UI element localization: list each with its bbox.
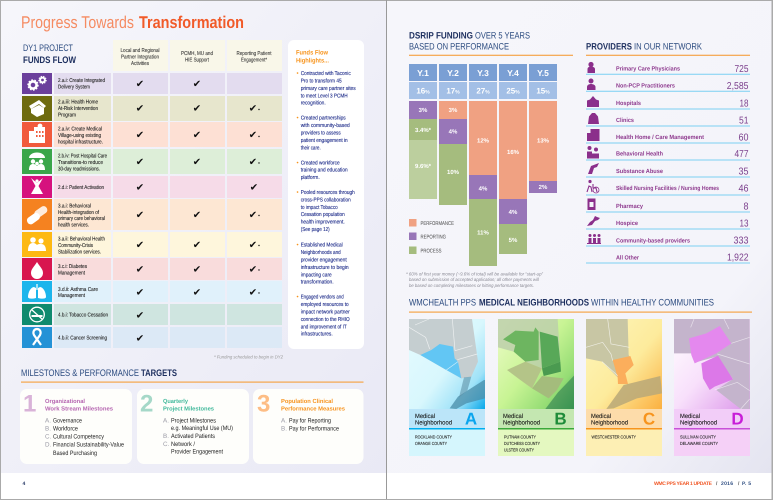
table row 2.a.iii: ✔ (193, 103, 201, 114)
left page number: 4 (22, 481, 26, 487)
row: substance abuse (588, 163, 749, 178)
heading: DY1 project funds flow: DY1 PROJECT (23, 43, 73, 54)
panel: quarterly project milestones: Network / (171, 441, 195, 448)
table row 2.b.iv (22, 149, 282, 174)
year headers: Y.2 (447, 68, 459, 78)
row: clinics: Clinics (616, 117, 635, 124)
row: health home care management: 60 (738, 132, 749, 144)
table row 3.c.i: ✔ (249, 264, 257, 275)
table row 3.d.ii (22, 281, 282, 302)
right page background (387, 0, 773, 500)
panel: quarterly project milestones: Provider Engagement (171, 449, 223, 456)
table row 3.c.i: 3.c.i: Diabetes (58, 263, 87, 270)
icon: house (29, 100, 46, 117)
heading: DSRIP funding (409, 30, 573, 56)
chart: DSRIP funding stacked bars (409, 64, 557, 266)
icon: clasped hands (26, 205, 49, 226)
row: primary care physicians: Primary Care Physicians (616, 66, 681, 72)
panel: neighborhood D: SULLIVAN COUNTY (680, 435, 716, 440)
panel: neighborhood D: Medical (680, 413, 700, 420)
highlight: medical neighborhoods: provider engagement (301, 256, 347, 264)
highlight: pooled resources: (See page 12) (301, 226, 330, 233)
table column headers: HIE Support (185, 58, 209, 64)
highlights heading: Highlights... (296, 58, 329, 64)
table row 4.b.ii: 4.b.ii: Cancer Screening (58, 334, 107, 342)
bar Y.2: 10% (447, 169, 460, 176)
highlight: PCMH recognition: to meet Level 3 PCMH (301, 92, 348, 99)
row: skilled nursing facilities: Skilled Nursing Facilities / Nursing Homes (616, 185, 720, 192)
table row 3.c.i: ✔ (136, 264, 144, 275)
heading: DSRIP funding: DSRIP FUNDING (409, 30, 473, 40)
table column headers: Local and Regional (120, 47, 160, 54)
row: health home care management (587, 129, 749, 144)
table row 4.b.i: 4.b.i: Tobacco Cessation (58, 312, 108, 318)
row: skilled nursing facilities: 46 (738, 184, 749, 194)
table row 2.a.iv (22, 122, 282, 147)
heading: DY1 project funds flow (23, 43, 76, 66)
icon: no smoking (30, 307, 44, 322)
table row 3.a.i: ✔ (193, 210, 201, 221)
table row 3.d.ii: ✔ (193, 287, 201, 298)
table row 3.c.i (22, 258, 282, 280)
left page background (0, 0, 386, 500)
title: Transformation (139, 13, 244, 32)
table row 2.b.iv: ✔ (249, 157, 257, 168)
bar Y.5: 13% (537, 138, 550, 144)
bar Y.4: 4% (509, 209, 518, 216)
highlight: workforce training: training and education (301, 167, 348, 174)
panel: population clinical performance measures: Pay for Performance (289, 425, 339, 432)
row: clinics: 51 (739, 116, 749, 126)
year headers: Y.5 (537, 68, 549, 78)
highlight: engaged vendors: infrastructures. (301, 331, 333, 338)
table row 2.a.iv: ✔ (249, 130, 257, 141)
bar Y.3: 4% (479, 186, 488, 192)
panel: neighborhood C (586, 319, 662, 456)
table row 2.a.iv: ✔ (193, 130, 201, 141)
highlight: engaged vendors (296, 294, 350, 338)
table row 3.a.ii: ✔ (249, 240, 257, 251)
panel: organizational milestones: 1 (23, 390, 36, 418)
panel: quarterly project milestones: C. (163, 441, 170, 448)
row: pharmacy: Pharmacy (616, 203, 644, 210)
table row 3.d.ii: Management (58, 293, 85, 299)
panel: organizational milestones: D. (45, 442, 52, 449)
table row 3.a.i: health services. (58, 221, 89, 228)
table row 3.a.i: ✔ (249, 210, 257, 221)
table row 2.b.iv: Transitions-to reduce (58, 159, 103, 166)
table row 3.a.i: 3.a.i: Behavioral (58, 202, 91, 210)
highlight: partnerships: their care. (301, 144, 321, 151)
panel: neighborhood D: DELAWARE COUNTY (680, 441, 718, 446)
table row 3.a.i: Health-integration of (58, 209, 99, 216)
highlight: engaged vendors: and improvement of IT (301, 323, 347, 330)
highlight: medical neighborhoods: Established Medical (301, 242, 343, 249)
bar Y.2 (439, 101, 467, 205)
table row 2.a.iii (22, 96, 282, 121)
map B (498, 319, 574, 409)
bar Y.1: 9.6%* (415, 163, 432, 170)
heading: DSRIP funding: OVER 5 YEARS (475, 30, 530, 40)
table row 3.a.ii: ✔ (136, 240, 144, 251)
table row 2.b.iv: ✔ (193, 157, 201, 168)
panel: neighborhood C: WESTCHESTER COUNTY (592, 435, 636, 440)
table row 2.d.i: 2.d.i: Patient Activation (58, 184, 104, 191)
legend (409, 219, 454, 254)
table row 2.d.i: ✔ (136, 182, 144, 193)
panel: organizational milestones: Based Purchasing (53, 450, 97, 457)
row: non-PCP practitioners (587, 78, 749, 92)
row: behavioral health (587, 146, 749, 160)
year headers: 25% (506, 86, 520, 96)
legend: REPORTING (420, 234, 446, 240)
highlight: pooled resources: health improvement. (301, 219, 345, 226)
row: community-based providers: Community-based providers (616, 238, 691, 244)
highlight: medical neighborhoods (296, 242, 349, 286)
footer: report name and page: P. 5 (742, 481, 751, 487)
table row 3.a.ii: Stabilization services. (58, 248, 101, 255)
table row 3.a.ii (22, 232, 282, 257)
bar Y.1 (409, 101, 437, 199)
panel: quarterly project milestones: Project Milestones (163, 406, 215, 412)
panel: neighborhood A: Neighborhood (415, 419, 453, 426)
row: non-PCP practitioners: 2,585 (727, 81, 749, 92)
table row 2.a.i: Delivery System (58, 84, 90, 91)
heading: milestones and performance targets: MILESTONES & PERFORMANCE (21, 368, 139, 379)
table row 2.a.iv: 2.a.iv: Create Medical (58, 126, 102, 132)
year headers: Y.4 (507, 68, 519, 78)
panel: organizational milestones: Work Stream Milestones (45, 406, 114, 412)
highlight: pooled resources: Pooled resources through (301, 189, 355, 196)
year headers: 16% (416, 86, 430, 96)
highlight: partnerships (296, 115, 350, 151)
highlight: partnerships: with community-based (300, 122, 350, 129)
panel: population clinical performance measures (253, 389, 364, 464)
row: health home care management: Health Home / Care Management (616, 134, 704, 141)
row: substance abuse: 35 (738, 166, 749, 178)
highlight: pooled resources: Cessation population (301, 211, 345, 218)
panel: organizational milestones: Workforce (53, 425, 78, 432)
row: clinics (588, 113, 749, 126)
panel: neighborhood B: DUTCHESS COUNTY (504, 441, 540, 446)
panel: organizational milestones: Financial Sustainability-Value (53, 442, 124, 449)
panel: quarterly project milestones: B. (163, 433, 169, 440)
panel: neighborhood A: A (465, 410, 477, 428)
row: hospitals (587, 96, 749, 110)
table column headers: Activities (131, 60, 149, 67)
bar Y.3: 11% (477, 230, 489, 236)
table row 2.a.iv: hospital infrastructure. (58, 138, 103, 145)
legend: PERFORMANCE (420, 221, 454, 227)
table column headers (113, 40, 282, 71)
footer: report name and page: 2016 (721, 481, 733, 487)
table row 3.c.i: Management (58, 270, 85, 276)
title (21, 13, 244, 32)
footer: report name and page: / (738, 481, 740, 487)
panel: population clinical performance measures: Pay for Reporting (289, 417, 331, 424)
heading: DSRIP funding: BASED ON PERFORMANCE (409, 42, 509, 52)
panel: quarterly project milestones: Activated Patients (171, 433, 215, 440)
highlight: medical neighborhoods: impacting care (301, 271, 332, 278)
highlight: pooled resources (296, 189, 355, 233)
panel: neighborhood A: Medical (415, 413, 435, 420)
highlight: engaged vendors: Engaged vendors and (301, 294, 344, 301)
panel: neighborhood C: Medical (591, 413, 611, 420)
table row 3.c.i: ✔ (193, 264, 201, 275)
heading: DY1 project funds flow: FUNDS FLOW (23, 55, 76, 66)
highlight: PCMH recognition: • (296, 71, 299, 77)
table row 2.b.iv: 2.b.iv: Post Hospital Care (58, 152, 107, 160)
table row 3.a.i (22, 199, 282, 230)
bar Y.4 (499, 101, 527, 254)
table row 2.a.i (22, 73, 282, 94)
row: all other: 1,922 (727, 252, 749, 264)
table column headers: Reporting Patient (236, 50, 272, 57)
highlight: workforce training: Created workforce (301, 159, 340, 166)
year headers: Y.3 (477, 68, 489, 78)
row: all other: All Other (616, 254, 640, 262)
panel: neighborhood A: ROCKLAND COUNTY (415, 435, 452, 440)
highlight: engaged vendors: employed resources to (301, 301, 349, 308)
heading: medical neighborhoods: WITHIN HEALTHY COMMUNITIES (591, 298, 714, 308)
table row 2.a.iii: At-Risk Intervention (58, 105, 98, 112)
highlight: PCMH recognition (296, 70, 356, 107)
title: Progress Towards (21, 13, 134, 32)
year headers: 17% (446, 86, 460, 96)
panel: organizational milestones: Cultural Competency (53, 433, 105, 440)
bar Y.1: 3.4%* (415, 127, 432, 134)
heading: medical neighborhoods: WMCHEALTH PPS (409, 298, 476, 308)
table row 3.a.ii: Community-Crisis (58, 242, 93, 249)
year headers: 27% (476, 86, 490, 96)
table row 2.b.iv: 30-day readmissions. (58, 165, 100, 172)
highlight: workforce training (296, 159, 348, 181)
row: hospice (587, 216, 749, 230)
table row 3.d.ii: ✔ (249, 287, 257, 298)
table row 2.a.iii: 2.a.iii: Health Home (58, 98, 98, 106)
table row 3.d.ii: 3.d.ii: Asthma Care (58, 286, 98, 293)
row: pharmacy: 8 (744, 202, 749, 212)
icon: umbrella and family (29, 152, 45, 170)
panel: organizational milestones (20, 389, 132, 464)
highlight: medical neighborhoods: transformation. (301, 279, 334, 286)
highlight: partnerships: providers to assess (301, 130, 341, 136)
highlight: PCMH recognition: Contracted with Taconic (301, 70, 351, 77)
legend: PROCESS (420, 248, 442, 254)
panel: population clinical performance measures: Population Clinical (281, 398, 333, 405)
panel: population clinical performance measures: 3 (257, 390, 270, 418)
bar Y.3 (469, 101, 497, 266)
row: hospice: 13 (740, 218, 749, 230)
row: community-based providers: 333 (734, 236, 749, 246)
chart footnote: * 60% of first year money (~9.6% of total) will be available for “start-up” (406, 272, 543, 276)
footer: report name and page: / (716, 481, 718, 487)
table row 3.a.i: ✔ (136, 210, 144, 221)
highlight: engaged vendors: impact network partner (301, 308, 350, 316)
panel: funds flow highlights (288, 40, 364, 349)
table row 2.a.iii: ✔ (249, 103, 257, 114)
panel: quarterly project milestones: Quarterly (163, 398, 189, 405)
row: community-based providers (587, 234, 749, 246)
table row 4.b.i (22, 304, 282, 325)
table row 2.d.i (22, 176, 282, 198)
highlight: pooled resources: to impact Tobacco (301, 204, 338, 211)
bar Y.3: 12% (477, 138, 490, 144)
highlight: engaged vendors: connection to the RHIO (301, 316, 350, 323)
highlight: partnerships: • (296, 116, 299, 122)
panel: neighborhood B: ULSTER COUNTY (504, 447, 534, 452)
chart footnote: be based on completing milestones or hitting performance targets. (409, 283, 534, 288)
row: pharmacy (588, 198, 749, 212)
highlight: workforce training: platform. (301, 174, 320, 181)
row: skilled nursing facilities (587, 180, 749, 194)
row: behavioral health: Behavioral Health (616, 150, 663, 158)
highlight: workforce training: • (296, 160, 299, 166)
highlight: medical neighborhoods: infrastructure to begin (301, 264, 349, 271)
highlights heading (296, 50, 329, 64)
highlight: PCMH recognition: primary care partner sites (301, 85, 356, 92)
icon: ribbon (33, 329, 41, 345)
icon: blood drop (31, 262, 43, 279)
bar Y.4: 5% (509, 237, 518, 244)
icon: two people (28, 237, 46, 251)
row: primary care physicians (588, 62, 749, 75)
panel: population clinical performance measures: B. (281, 425, 287, 432)
bar Y.5: 2% (539, 184, 548, 191)
bar Y.1: 3% (419, 107, 428, 114)
table row 2.a.iv: ✔ (136, 130, 144, 141)
panel: organizational milestones: C. (45, 433, 52, 440)
chart footnote: based on submission of accepted application; all other payments will (409, 277, 540, 282)
table footnote: * Funding scheduled to begin in DY2 (214, 354, 283, 360)
table row 3.a.i: primary care behavioral (58, 215, 105, 222)
panel: neighborhood B (498, 319, 574, 456)
bar Y.4: 16% (507, 149, 520, 156)
panel: organizational milestones: Governance (53, 417, 82, 424)
row: primary care physicians: 725 (734, 64, 749, 75)
table row 2.a.i: 2.a.i: Create Integrated (58, 77, 105, 84)
table row 3.a.ii: ✔ (193, 240, 201, 251)
panel: neighborhood C: Neighborhood (591, 419, 629, 426)
highlight: engaged vendors: • (296, 295, 299, 301)
highlight: pooled resources: cross-PPS collaboration (301, 196, 351, 203)
row: substance abuse: Substance Abuse (616, 168, 664, 175)
panel: neighborhood D (674, 319, 750, 456)
heading: providers in our network (586, 42, 750, 56)
table row 4.b.i: ✔ (136, 310, 144, 321)
table row 3.a.ii: 3.a.ii: Behavioral Health (58, 236, 105, 242)
highlight: partnerships: Created partnerships (301, 115, 346, 122)
map D (674, 319, 750, 409)
panel: population clinical performance measures: A. (281, 417, 287, 424)
panel: quarterly project milestones: e.g. Meaningful Use (MU) (171, 425, 233, 432)
panel: neighborhood A (409, 319, 485, 456)
footer: report name and page (654, 481, 751, 487)
panel: neighborhood B: Neighborhood (503, 419, 541, 426)
panel: neighborhood B: Medical (503, 413, 523, 420)
heading: milestones and performance targets (21, 368, 364, 383)
bar Y.2: 3% (449, 107, 458, 114)
year headers: Y.1 (417, 68, 429, 78)
highlight: PCMH recognition: recognition. (301, 100, 326, 107)
row: hospitals: 18 (740, 98, 749, 110)
table column headers: PCMH, MU and (181, 50, 213, 57)
panel: neighborhood B: PUTNAM COUNTY (504, 435, 536, 440)
panel: quarterly project milestones: A. (163, 417, 169, 424)
bar Y.5 (529, 101, 557, 193)
chart footnote (406, 272, 543, 288)
table row 2.a.iv: Village-using existing (58, 132, 101, 139)
table row 4.b.ii (22, 327, 282, 348)
table row 2.a.iii: ✔ (136, 103, 144, 114)
icon: hospital (29, 124, 45, 143)
table: providers in network (586, 62, 750, 264)
highlight: PCMH recognition: Pro to transform 45 (301, 77, 342, 84)
table column headers: Engagement* (241, 58, 268, 64)
icon: person on peak (31, 178, 43, 194)
panel: quarterly project milestones: Project Milestones (171, 417, 216, 424)
heading: milestones and performance targets: TARGETS (141, 368, 177, 379)
table row 4.b.ii: ✔ (136, 333, 144, 344)
row: hospitals: Hospitals (616, 100, 642, 107)
panel: population clinical performance measures: Performance Measures (281, 406, 346, 412)
panel: neighborhood C: C (643, 410, 655, 428)
highlight: medical neighborhoods: • (296, 243, 299, 249)
icon: lungs (28, 284, 46, 299)
footer: report name and page: WMC PPS YEAR 1 UPDATE (654, 481, 713, 487)
table column headers: Partner Integration (121, 54, 159, 60)
panel: quarterly project milestones (137, 389, 249, 464)
panel: neighborhood A: ORANGE COUNTY (415, 441, 447, 446)
row: non-PCP practitioners: Non-PCP Practitioners (616, 82, 676, 90)
heading: medical neighborhoods (409, 298, 752, 313)
highlight: medical neighborhoods: Neighborhoods and (301, 249, 341, 256)
map A (409, 319, 485, 409)
heading: providers in our network: PROVIDERS (586, 42, 632, 52)
year headers (409, 64, 557, 99)
highlights heading: Funds Flow (296, 50, 328, 56)
table row 2.b.iv: ✔ (136, 157, 144, 168)
bar Y.2: 4% (449, 128, 458, 136)
row: behavioral health: 477 (734, 149, 749, 160)
panel: organizational milestones: Organizational (45, 398, 85, 405)
heading: providers in our network: IN OUR NETWORK (634, 42, 703, 52)
panel: neighborhood B: B (554, 410, 567, 428)
highlight: partnerships: patient engagement in (301, 137, 348, 144)
icon: gears (28, 76, 46, 90)
highlight: pooled resources: • (296, 190, 299, 196)
table row 2.d.i: ✔ (250, 182, 258, 193)
map C (586, 319, 662, 409)
panel: neighborhood D: D (731, 410, 744, 428)
year headers: 15% (536, 86, 550, 96)
table row 2.a.iii: Program (58, 112, 76, 118)
table row 2.a.i: ✔ (193, 79, 201, 90)
panel: quarterly project milestones: 2 (140, 390, 153, 418)
heading: medical neighborhoods: MEDICAL NEIGHBORHOODS (479, 298, 589, 308)
panel: organizational milestones: B. (45, 425, 51, 432)
panel: neighborhood D: Neighborhood (680, 419, 718, 426)
row: hospice: Hospice (616, 220, 639, 227)
panel: organizational milestones: A. (45, 417, 51, 424)
table row 2.a.i: ✔ (136, 79, 144, 90)
row: all other (616, 252, 749, 264)
table row 3.d.ii: ✔ (136, 287, 144, 298)
